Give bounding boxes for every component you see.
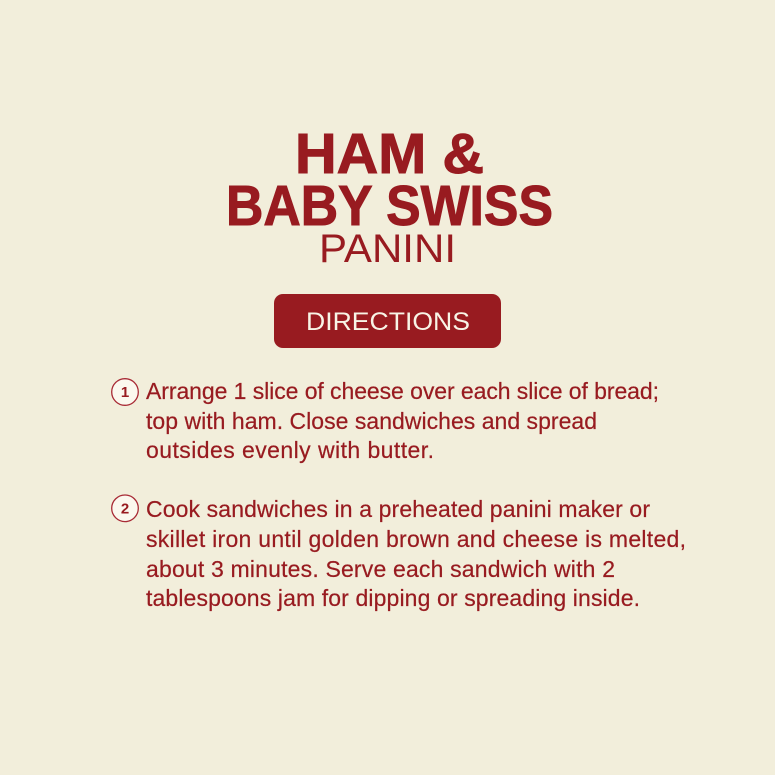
step 1 text: outsides evenly with butter.	[146, 437, 434, 463]
step 2 text: skillet iron until golden brown and cheese is melted,	[146, 526, 686, 552]
step 1 text: Arrange 1 slice of cheese over each slice of bread;	[146, 378, 659, 404]
icon: number 1	[112, 379, 138, 405]
title	[226, 122, 553, 271]
title line: baby swiss: BABY SWISS	[226, 174, 553, 238]
title line: panini: PANINI	[319, 227, 456, 271]
step 2	[112, 495, 686, 611]
step 2 text	[146, 496, 686, 611]
directions badge: DIRECTIONS	[306, 308, 470, 336]
step 1 text: top with ham. Close sandwiches and spread	[146, 408, 597, 434]
step 1	[112, 378, 659, 463]
step 2 text: about 3 minutes. Serve each sandwich with 2	[146, 556, 615, 582]
step 2 text: tablespoons jam for dipping or spreading inside.	[146, 585, 640, 611]
icon: number 2	[112, 495, 138, 522]
icon: number 1: 1	[121, 384, 129, 401]
directions badge	[274, 294, 501, 348]
icon: number 2: 2	[121, 500, 129, 518]
title line: ham: HAM &	[295, 122, 484, 186]
step 2 text: Cook sandwiches in a preheated panini maker or	[146, 496, 650, 522]
step 1 text	[146, 378, 659, 463]
